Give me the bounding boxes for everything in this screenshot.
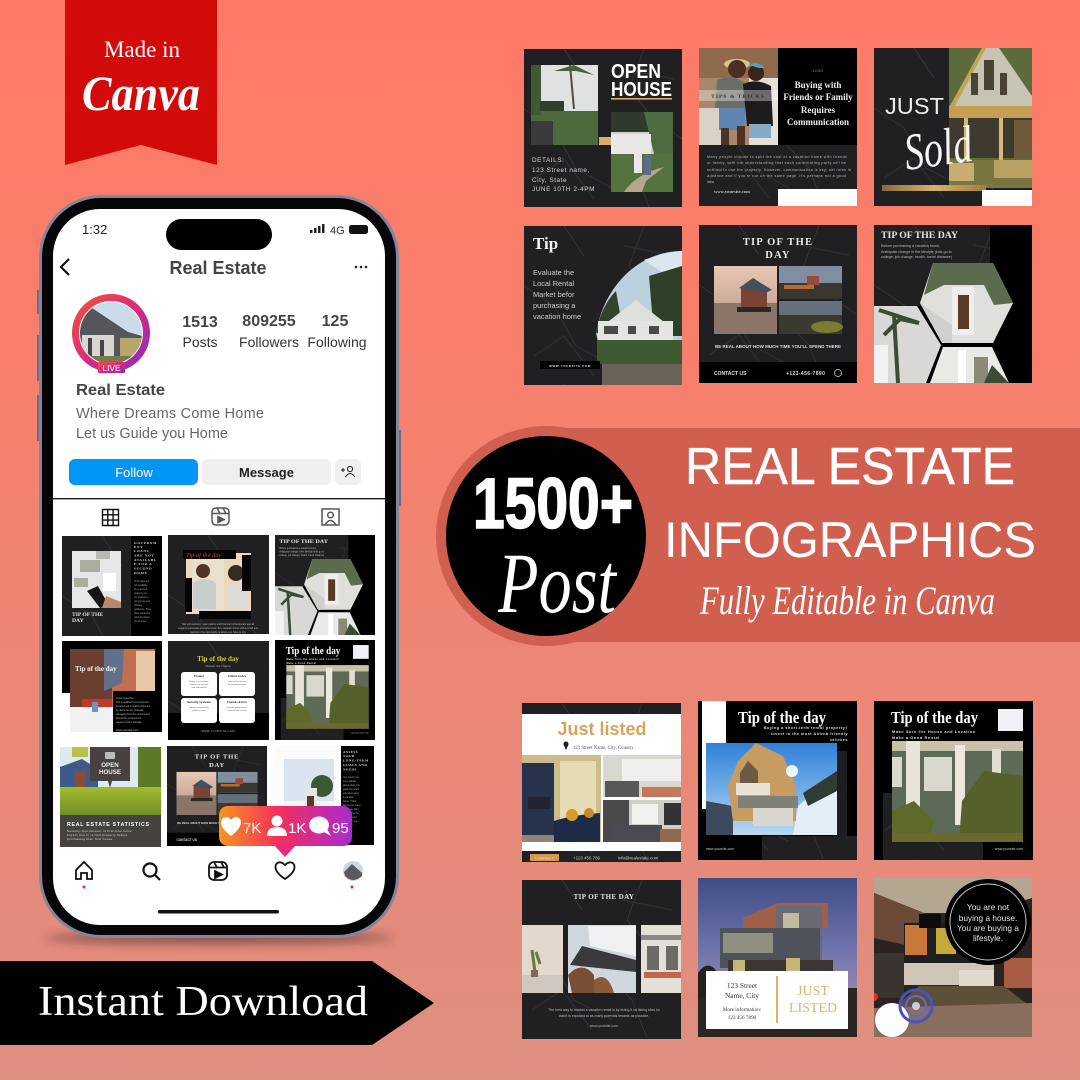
paragraph: Many people choose to split the cost of a vacation home with friends — [707, 155, 847, 159]
heading line 2: INFOGRAPHICS — [664, 512, 1036, 568]
mini grid: tile 1: occupy as your — [134, 600, 150, 603]
notification bubble: 7K — [243, 820, 261, 837]
mini grid: tile 5: Security systems — [187, 700, 211, 704]
mini grid: tile 4: Hire a qualified home inspector — [116, 701, 149, 704]
mini grid: tile 9: how often you — [343, 820, 359, 823]
subheading — [764, 726, 848, 742]
bottom photo — [930, 347, 1009, 383]
mini grid: tile 5: system is a must — [192, 709, 207, 712]
message button: Message — [239, 465, 294, 480]
tile: tip of the day hexagon — [874, 225, 1032, 383]
title: sold script: Sold — [901, 116, 977, 182]
avatar: LIVE — [102, 363, 121, 373]
address — [564, 742, 634, 751]
mini grid: tile 4 — [62, 641, 162, 741]
photo: bright lounge — [603, 755, 681, 797]
mini grid: tile 1: SECOND — [134, 566, 152, 570]
banner band — [540, 428, 1080, 642]
stats: Posts — [182, 334, 218, 350]
tab icon: tagged — [322, 509, 339, 525]
body — [881, 244, 952, 259]
photo: arch white house — [596, 251, 682, 385]
message button — [202, 459, 331, 485]
notification dots — [82, 886, 354, 888]
mini grid: tile 9: about how many — [343, 804, 361, 807]
nav icon: home — [76, 862, 92, 879]
tile: just listed house — [698, 878, 857, 1037]
badge outer ring — [436, 426, 656, 646]
heading: DAY — [765, 250, 791, 261]
tile: tip of the day boathouse — [699, 225, 857, 383]
address: 123 Street Name, City, Country — [573, 746, 634, 751]
statistics panel — [60, 815, 161, 847]
body: Anticipate change in the lifestyle (kids go to — [881, 250, 952, 254]
white accent — [702, 701, 726, 809]
website: www.yoursite.com — [590, 1024, 618, 1028]
white block — [982, 190, 1032, 206]
stats — [182, 313, 367, 350]
mini grid: tile 5: where friends can stay — [228, 709, 247, 712]
marble strip — [762, 836, 857, 860]
subheading: utilities — [830, 738, 848, 742]
heading: TIP OF THE DAY — [881, 230, 959, 240]
ribbon: made in canva: Made in — [104, 37, 180, 62]
notification bubble — [219, 806, 352, 857]
body text: purchasing a — [533, 301, 576, 310]
photo: smiling couple — [699, 48, 778, 145]
phone screen — [53, 209, 385, 925]
photo: modern house at dusk — [698, 878, 857, 1037]
tile: lifestyle quote — [870, 878, 1032, 1037]
mini grid: tile 9: will use it — [343, 824, 353, 827]
footer bar: info@realestate.com — [618, 856, 659, 860]
contact bar — [699, 362, 857, 383]
mini grid: tile 1: are looking to — [134, 596, 149, 599]
open house flag: OPEN — [101, 762, 119, 769]
photo: laptop — [568, 925, 636, 993]
body text: vacation home — [533, 312, 581, 321]
mini grid: tile 1: not available — [134, 584, 148, 587]
photo: interior — [874, 878, 1032, 1037]
mini grid: tile 1: residence. They — [134, 608, 152, 611]
mini grid: tile 2: Talk with advisors, real realtors and financial professionals and all — [182, 623, 255, 626]
heading: Tip of the day — [738, 708, 827, 727]
stats: 125 — [322, 313, 348, 330]
heading: open house: OPEN — [611, 61, 661, 83]
mini grid: tile 1: rules to protect — [134, 616, 150, 619]
website label: WWW.YOURSITE.COM — [549, 364, 591, 368]
mini grid: tile 5: Maintain Your Property — [205, 665, 231, 668]
bio — [76, 382, 264, 442]
banner: instant download — [0, 961, 434, 1045]
follow button: Follow — [115, 465, 153, 480]
mini grid: tile 1: ENT — [134, 545, 143, 549]
mini grid: tile 1: government — [134, 620, 147, 623]
phone side buttons — [37, 290, 401, 506]
mini text: YOUR — [343, 754, 355, 758]
mini cards — [181, 672, 255, 723]
open house flag — [90, 747, 130, 788]
mini grid: tile 5 — [168, 641, 269, 740]
add friend button — [335, 459, 361, 485]
mini text — [72, 612, 103, 624]
tile: just sold — [874, 48, 1032, 206]
mini grid: tile 9: about what your — [343, 784, 360, 787]
paragraph: or family, with the understanding that each contributing party will be — [707, 161, 846, 165]
mini grid: tile 9: a vacation — [343, 796, 355, 799]
event details — [532, 157, 595, 193]
mini grid: tile 9: You need to be — [343, 776, 360, 779]
heading: open house: HOUSE — [611, 79, 672, 101]
statistics panel: REAL ESTATE STATISTICS — [67, 822, 150, 828]
paragraph: advance and if you're not on the same page, it's perhaps not a good — [707, 174, 846, 178]
tile: just listed — [522, 703, 681, 862]
bottom navigation — [76, 861, 363, 888]
quote circle: You are buying a — [957, 923, 1019, 933]
mini grid: tile 3 — [275, 535, 375, 635]
quote circle: buying a house. — [959, 913, 1017, 923]
event details: City, State — [532, 177, 567, 184]
tips band: TIPS & TRICKS — [711, 94, 765, 100]
bio: Real Estate — [76, 382, 165, 399]
quote circle: lifestyle. — [973, 933, 1003, 943]
mini grid: tile 4: to check out any potential — [116, 709, 144, 712]
marble strip — [883, 793, 983, 860]
mini grid: tile 4: causes in other damage — [116, 721, 142, 724]
body: college, job change, health, travel distance) — [881, 255, 952, 259]
mini grid: tile 5: Consider getting a place — [227, 706, 247, 709]
mini grid: tile 5: requires that you take — [190, 683, 208, 686]
caption: BE REAL ABOUT HOW MUCH TIME YOU'LL SPEND THERE — [715, 344, 841, 349]
mini grid: tile 9: you are buying — [343, 792, 359, 795]
just listed label — [789, 984, 837, 1016]
phone shadow — [44, 932, 394, 944]
photo: beach garden — [531, 65, 598, 145]
mini text: NEEDS — [343, 768, 357, 772]
body text: Local Rental — [533, 279, 574, 288]
tile: tip of the day chalet — [698, 701, 857, 860]
mini grid: tile 9: property and — [343, 816, 357, 819]
tab icon: reels — [212, 508, 229, 525]
heading: open house — [611, 61, 672, 101]
photo: grey lounge — [603, 800, 681, 842]
photo: harbour — [779, 266, 842, 299]
mini grid: tile 5: Look into the decor of — [228, 680, 247, 683]
address: More information: — [723, 1006, 762, 1013]
body: that it is exposed to as many potential tenants as possible. — [559, 1014, 649, 1018]
mini grid: tile 1: AVAILABL — [134, 558, 157, 562]
mini text: DAY — [72, 618, 84, 624]
avatar — [76, 298, 146, 373]
heading — [783, 80, 853, 127]
badge text: 1500+: 1500+ — [473, 465, 633, 544]
stats: 809255 — [242, 313, 296, 330]
nav icon: heart — [275, 862, 295, 879]
address — [723, 981, 762, 1021]
mini text: LONG-TERM — [343, 758, 369, 762]
footer bar: +123 456 789 — [573, 856, 601, 860]
mini grid: tile 9: goals are when — [343, 788, 360, 791]
title: just: JUST — [885, 93, 944, 119]
status bar: 1:32 — [82, 222, 107, 237]
heading: TIP OF THE DAY — [574, 893, 634, 901]
body text — [533, 268, 581, 321]
nav icon: search — [144, 864, 160, 880]
heading: Communication — [787, 117, 849, 127]
mini grid: tile 5: Friends & Fun — [227, 700, 247, 704]
info panel — [706, 971, 848, 1029]
subheading — [892, 729, 976, 740]
tile: tip evaluate — [524, 226, 682, 385]
contact bar: CONTACT US — [714, 371, 747, 377]
photo: snowy chalet — [706, 743, 837, 835]
address: 123 456 7890 — [728, 1015, 757, 1021]
subheading: Invest in the most Airbnb friendly — [771, 732, 848, 736]
mini grid: tile 2: staying in the community is where you have to buy — [190, 631, 247, 634]
mini grid: tile 1: HOME — [134, 571, 148, 575]
status bar: 4G — [330, 225, 345, 237]
statistics panel: purchasing their first house. — [67, 837, 114, 841]
profile header — [61, 258, 367, 278]
quote circle: You are not — [967, 902, 1010, 912]
body text: Market befor — [533, 290, 575, 299]
mini grid: tile 5: the property you want — [228, 683, 247, 686]
banner: instant download: Instant Download — [38, 979, 368, 1025]
icon: speech bubble — [309, 816, 331, 836]
status bar — [82, 219, 368, 250]
event details: JUNE 10TH 2-4PM — [532, 186, 595, 193]
logo: LOGO — [813, 69, 823, 73]
mini text: GOALS AND — [343, 763, 367, 767]
heading: Just listed — [557, 719, 647, 739]
heading: Friends or Family — [783, 92, 853, 102]
mini grid: tile 6 — [275, 640, 375, 740]
subheading: Make a Good Rental — [892, 735, 940, 740]
address: Name, City — [725, 991, 759, 1000]
tile: tips and tricks — [699, 48, 857, 206]
photo: plant wall — [522, 925, 563, 993]
mini grid: tile 1: E FOR A — [134, 562, 152, 566]
mini grid: tile 9 — [275, 746, 375, 845]
footer bar: CONTACT — [535, 856, 555, 860]
accent: gold block — [599, 137, 611, 145]
mini grid: tile 9: very realistic — [343, 780, 357, 783]
quote circle — [946, 880, 1030, 964]
photo: columns and palms — [892, 741, 1023, 842]
mini grid: tile 1: LOANS — [134, 549, 149, 553]
bio: Where Dreams Come Home — [76, 406, 264, 422]
address: 123 Street — [727, 981, 758, 990]
open house flag: HOUSE — [99, 769, 121, 776]
paragraph — [707, 155, 851, 184]
mini grid: tile 9: years you plan — [343, 808, 359, 811]
mini grid: tile 1: ARE NOT — [134, 554, 154, 558]
phone frame — [39, 195, 399, 938]
mini text: ASSESS — [343, 750, 358, 754]
banner: real estate infographics — [436, 426, 1080, 646]
photo: rocky shore — [779, 301, 843, 334]
body: Before purchasing a vacation home, — [881, 244, 940, 248]
photo: living room — [522, 755, 601, 842]
icon: person — [267, 816, 287, 836]
mini text: Tip of the day — [186, 552, 222, 559]
heading: TIP OF THE — [743, 237, 813, 248]
profile header: Real Estate — [169, 258, 267, 278]
mini grid: tile 1: have restrictive — [134, 612, 151, 615]
event details: DETAILS: — [532, 157, 564, 164]
mini grid: tile 9: home. Think — [343, 800, 357, 803]
website: www.yoursite.com — [706, 847, 734, 851]
mini grid: tile 5: care and maintain — [191, 686, 207, 689]
mini grid: tile 1: for a second — [134, 588, 148, 591]
nav icon: reels — [209, 862, 227, 880]
heading line 1: REAL ESTATE — [685, 438, 1015, 496]
tile: tip of the day palms — [874, 701, 1033, 860]
mini text: TIP OF THE — [72, 612, 103, 618]
paragraph: entitled to use the property. However, communication is key; set rules in — [707, 168, 851, 172]
contact bar: +123-456-7890 — [786, 371, 825, 377]
tile: open house — [524, 49, 682, 207]
mini grid: tile 2 — [168, 535, 269, 634]
mini grid: tile 4: experienced in beach properties — [116, 705, 151, 708]
tab icon: grid — [102, 510, 118, 526]
mini grid: tile 1: GOVERNM — [134, 541, 157, 545]
mini grid: tile 7 — [60, 747, 161, 847]
stats: Following — [307, 334, 367, 350]
website label — [540, 361, 600, 369]
mini grid: tile 4: www.yoursite.com — [116, 728, 139, 732]
body: The best way to market a vacation rental is by listing it on listing sites so — [548, 1008, 660, 1012]
badge text: post: Post — [497, 535, 618, 631]
mini grid: tile 5: Having a home security — [189, 706, 209, 709]
stats: Followers — [239, 334, 299, 350]
subheading: Make Sure the House and Location — [892, 729, 976, 734]
decorative circles — [870, 990, 932, 1037]
event details: 123 Street name, — [532, 167, 590, 174]
mini grid: tile 1 — [62, 536, 162, 636]
white block — [778, 189, 857, 206]
badge circle — [446, 436, 646, 636]
icon: heart — [221, 817, 241, 836]
mini grid: tile 8 — [167, 746, 267, 846]
website: www.yoursite.com — [995, 847, 1023, 851]
subtitle script: Fully Editable in Canva — [699, 578, 995, 623]
nav avatar — [343, 861, 363, 881]
notification bubble: 1K — [288, 820, 306, 837]
photo: couple walking — [611, 112, 673, 192]
bio: Let us Guide you Home — [76, 426, 228, 442]
paragraph: idea. — [707, 180, 715, 184]
heading — [743, 237, 813, 261]
hexagon photo — [920, 263, 1013, 343]
heading: Buying with — [795, 80, 841, 90]
just listed label: LISTED — [789, 1001, 837, 1016]
tips band — [699, 90, 778, 101]
ribbon: made in canva — [65, 0, 217, 165]
website: www.yoursite.com — [714, 189, 750, 194]
statistics panel: buyers live in rented property before — [67, 833, 128, 837]
mini text: Tip of the day — [75, 665, 117, 673]
phone mockup — [37, 195, 401, 938]
heading: Requires — [801, 105, 836, 115]
tab divider — [53, 498, 385, 499]
mini grid: tile 2: suggest real estate pros who know. Buy vacation home without rush and — [178, 627, 259, 630]
mini grid: tile 9: on keeping the — [343, 812, 359, 815]
mini grid: tile 5: WWW.YOURSITE.COM — [201, 730, 235, 733]
mini grid: tile 1: property you — [134, 592, 148, 595]
subheading: Buying a short-term rental property? — [764, 726, 848, 730]
home indicator — [158, 910, 279, 914]
mini grid: tile 5: Colour codes — [228, 674, 247, 678]
tile: tip of the day laptop — [522, 880, 681, 1039]
mini grid: tile 4: Know Inspection — [116, 697, 134, 700]
photo: porch house — [949, 48, 1032, 188]
follow button — [69, 459, 198, 485]
just listed label: JUST — [797, 984, 829, 999]
ribbon: made in canva: Canva — [82, 65, 200, 121]
body text: Evaluate the — [533, 268, 574, 277]
heading: Tip of the day — [891, 708, 979, 727]
left photo — [874, 306, 941, 383]
mini grid: tile 1: VHA loans are — [134, 580, 150, 583]
statistics panel: Seventy-four percent of first-time home — [67, 829, 132, 833]
footer bar — [522, 851, 681, 862]
photo: boathouse — [714, 266, 777, 334]
mini text — [343, 750, 369, 772]
logo placeholder — [998, 709, 1023, 731]
divider — [776, 976, 778, 1023]
mini heading: Tip of the day — [197, 655, 239, 663]
heading: tip: Tip — [533, 234, 558, 253]
mini grid: tile 5: Protect — [194, 674, 204, 678]
stats: 1513 — [182, 314, 218, 331]
mini grid: tile 1: primary — [134, 604, 143, 607]
photo: balcony building — [641, 925, 681, 993]
mini grid: tile 4: Should the environment — [116, 717, 142, 720]
body — [548, 1008, 660, 1018]
mini grid: tile 5: Buying a second home — [189, 681, 209, 683]
mini grid: tile 4: damaging from the environment — [116, 713, 150, 716]
notification bubble: 95 — [332, 820, 349, 837]
gold bar — [882, 185, 986, 191]
